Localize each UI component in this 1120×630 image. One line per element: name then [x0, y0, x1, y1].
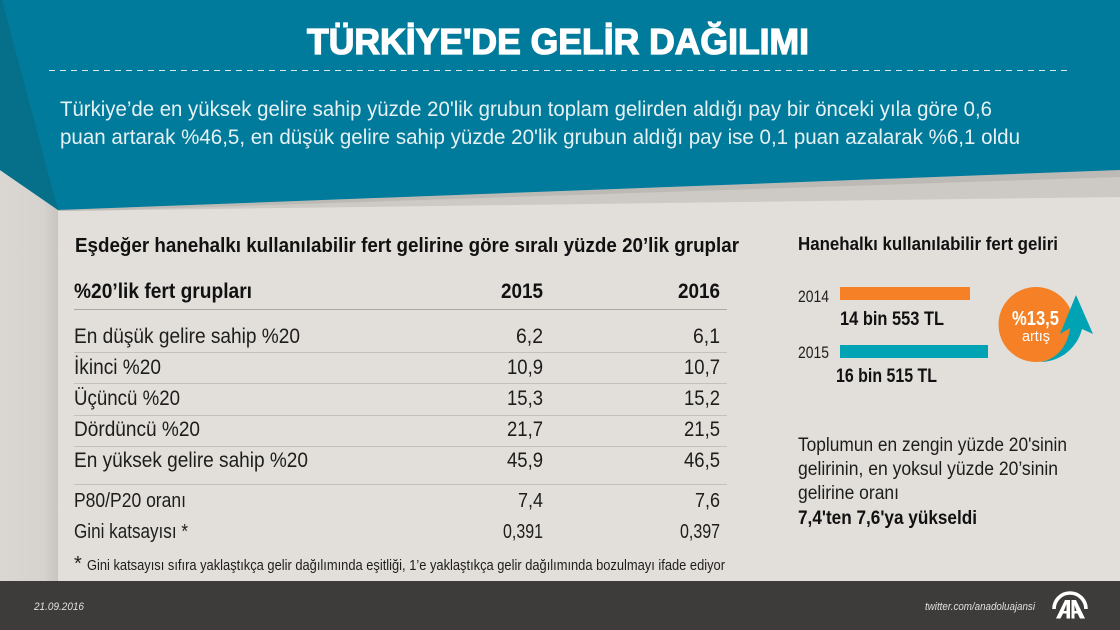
table header row: [74, 280, 720, 303]
row: highest income: [74, 449, 720, 472]
row: lowest income: 6,1: [693, 325, 720, 348]
intro text: puan artarak %46,5, en düşük gelire sahip yüzde 20'lik grubun aldığı pay ise 0,1 puan azalarak %6,1 oldu: [60, 126, 1020, 149]
bar 2015: 2015: [798, 343, 829, 362]
growth badge: [998, 287, 1093, 362]
row: second: 10,7: [684, 356, 720, 379]
row: third: Üçüncü %20: [74, 387, 180, 410]
row: highest income: En yüksek gelire sahip %20: [74, 449, 308, 472]
row: third: 15,3: [507, 387, 543, 410]
intro text: Türkiye’de en yüksek gelire sahip yüzde 20'lik grubun toplam gelirden aldığı pay bir önceki yıla göre 0,6: [60, 98, 992, 121]
row: fourth: 21,5: [684, 418, 720, 441]
row: P80/P20: 7,4: [518, 490, 543, 512]
twitter handle: twitter.com/anadoluajansi: [925, 601, 1035, 613]
row: P80/P20: 7,6: [695, 490, 720, 512]
side note: [798, 435, 1067, 529]
table header row: %20’lik fert grupları: [74, 280, 252, 303]
row: second: İkinci %20: [74, 356, 161, 379]
row: lowest income: 6,2: [516, 325, 543, 348]
bar 2014: [798, 287, 970, 330]
bar 2014: 14 bin 553 TL: [840, 309, 944, 330]
growth value: %13,5: [1012, 308, 1059, 330]
side note: Toplumun en zengin yüzde 20'sinin: [798, 435, 1067, 456]
row: fourth: [74, 418, 720, 441]
row: second: 10,9: [507, 356, 543, 379]
row: third: 15,2: [684, 387, 720, 410]
row: third: [74, 387, 720, 410]
side note: gelirinin, en yoksul yüzde 20’sinin: [798, 459, 1058, 480]
row: P80/P20: [74, 490, 720, 512]
row: second: [74, 356, 720, 379]
row: highest income: 45,9: [507, 449, 543, 472]
footnote: [74, 553, 725, 575]
row: lowest income: [74, 325, 720, 348]
footnote: Gini katsayısı sıfıra yaklaştıkça gelir dağılımında eşitliği, 1’e yaklaştıkça gelir dağılımında bozulmayı ifade ediyor: [87, 557, 725, 574]
row: fourth: 21,7: [507, 418, 543, 441]
bar 2014: 2014: [798, 287, 829, 306]
table heading: Eşdeğer hanehalkı kullanılabilir fert gelirine göre sıralı yüzde 20’lik gruplar: [75, 234, 739, 257]
growth label: artış: [1022, 328, 1050, 345]
bar 2015: 16 bin 515 TL: [836, 366, 937, 387]
footer bar: [0, 581, 1120, 630]
row: highest income: 46,5: [684, 449, 720, 472]
footnote: *: [74, 553, 82, 575]
table header row: 2015: [501, 280, 543, 303]
side heading: Hanehalkı kullanılabilir fert geliri: [798, 234, 1058, 254]
panel: light content sheet: [58, 197, 1120, 581]
row: Gini: 0,391: [503, 521, 543, 543]
row: lowest income: En düşük gelire sahip %20: [74, 325, 300, 348]
row: Gini: Gini katsayısı *: [74, 521, 188, 543]
income table: [74, 280, 727, 543]
row: Gini: 0,397: [680, 521, 720, 543]
bar 2015: [798, 343, 988, 387]
panel: teal header band: [0, 0, 1120, 210]
icon: agency logo: [1054, 593, 1086, 618]
row: fourth: Dördüncü %20: [74, 418, 200, 441]
row: Gini: [74, 521, 720, 543]
icon: rising arrow: [1040, 295, 1093, 362]
icon: orange circle: [998, 287, 1074, 362]
side note: gelirine oranı: [798, 483, 899, 504]
side note: 7,4'ten 7,6'ya yükseldi: [798, 508, 977, 529]
intro text: [60, 98, 1020, 149]
bar chart: household income: [798, 287, 988, 387]
title: TÜRKİYE'DE GELİR DAĞILIMI: [307, 21, 809, 62]
date: 21.09.2016: [33, 601, 85, 613]
row: P80/P20: P80/P20 oranı: [74, 490, 186, 512]
title divider: [49, 70, 1069, 72]
table header row: 2016: [678, 280, 720, 303]
